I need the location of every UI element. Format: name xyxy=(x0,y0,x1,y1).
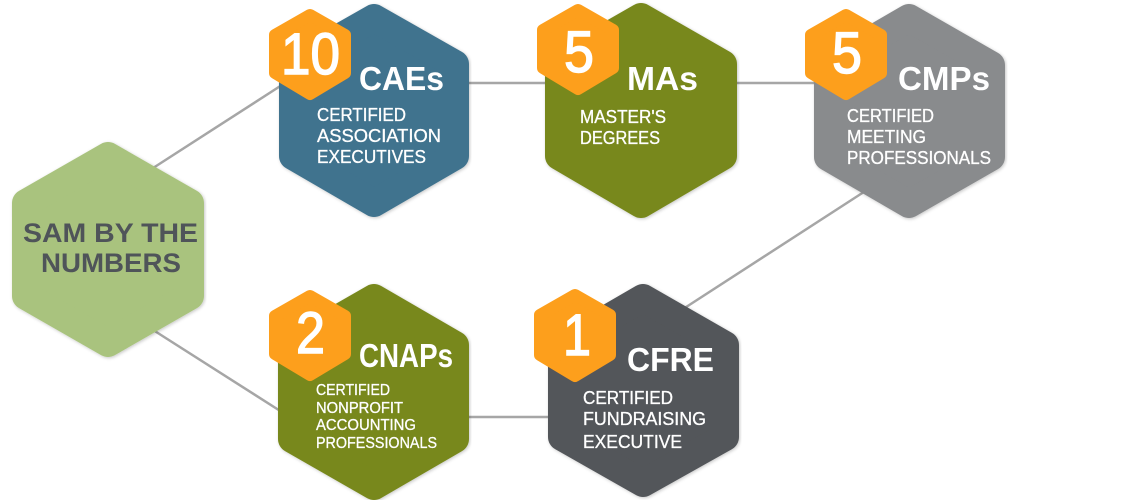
panel: SAM by the numbers xyxy=(23,156,198,343)
panel: CFRE xyxy=(540,295,725,483)
panel: CAEs: CAEs xyxy=(359,60,444,97)
icon: orange hexagon 5: 5 xyxy=(832,21,862,86)
icon: orange hexagon 2: 2 xyxy=(296,301,325,366)
panel: CFRE: FUNDRAISING xyxy=(583,409,706,429)
panel: CFRE: EXECUTIVE xyxy=(583,432,682,452)
panel: CAEs: ASSOCIATION xyxy=(317,126,441,146)
panel: MAs: DEGREES xyxy=(580,128,660,148)
icon: orange hexagon 1 xyxy=(540,295,610,376)
panel: SAM by the numbers: NUMBERS xyxy=(41,248,181,278)
heading: SAM by the numbers: SAM BY THE xyxy=(23,218,198,248)
icon: orange hexagon 2 xyxy=(275,296,345,375)
panel: CNAPs: CERTIFIED xyxy=(316,382,390,399)
panel: CFRE: CERTIFIED xyxy=(583,388,673,408)
icon: orange hexagon 1: 1 xyxy=(563,303,591,368)
icon: orange hexagon 5 xyxy=(811,15,881,94)
panel: CMPs: CMPs xyxy=(898,60,990,97)
panel: CMPs: CERTIFIED xyxy=(847,106,934,126)
panel: MAs: MAs xyxy=(627,60,698,97)
panel: CNAPs xyxy=(275,296,455,486)
panel: CAEs: EXECUTIVES xyxy=(317,147,426,167)
panel: CAEs xyxy=(275,15,455,203)
icon: orange hexagon 5: 5 xyxy=(564,20,594,85)
icon: orange hexagon 5 xyxy=(543,10,613,89)
panel: CNAPs: CNAPs xyxy=(359,337,453,374)
panel: CAEs: CERTIFIED xyxy=(317,105,406,125)
panel: CMPs: PROFESSIONALS xyxy=(847,148,991,168)
connector lines xyxy=(150,83,870,417)
panel: CNAPs: ACCOUNTING xyxy=(316,417,416,434)
panel: MAs xyxy=(543,10,723,204)
panel: MAs: MASTER'S xyxy=(580,107,666,127)
panel: CNAPs: NONPROFIT xyxy=(316,400,403,417)
panel: CFRE: CFRE xyxy=(627,341,714,378)
icon: orange hexagon 10: 10 xyxy=(281,22,340,87)
panel: CMPs: MEETING xyxy=(847,127,926,147)
panel: CNAPs: PROFESSIONALS xyxy=(316,435,437,452)
panel: CMPs xyxy=(811,15,991,204)
